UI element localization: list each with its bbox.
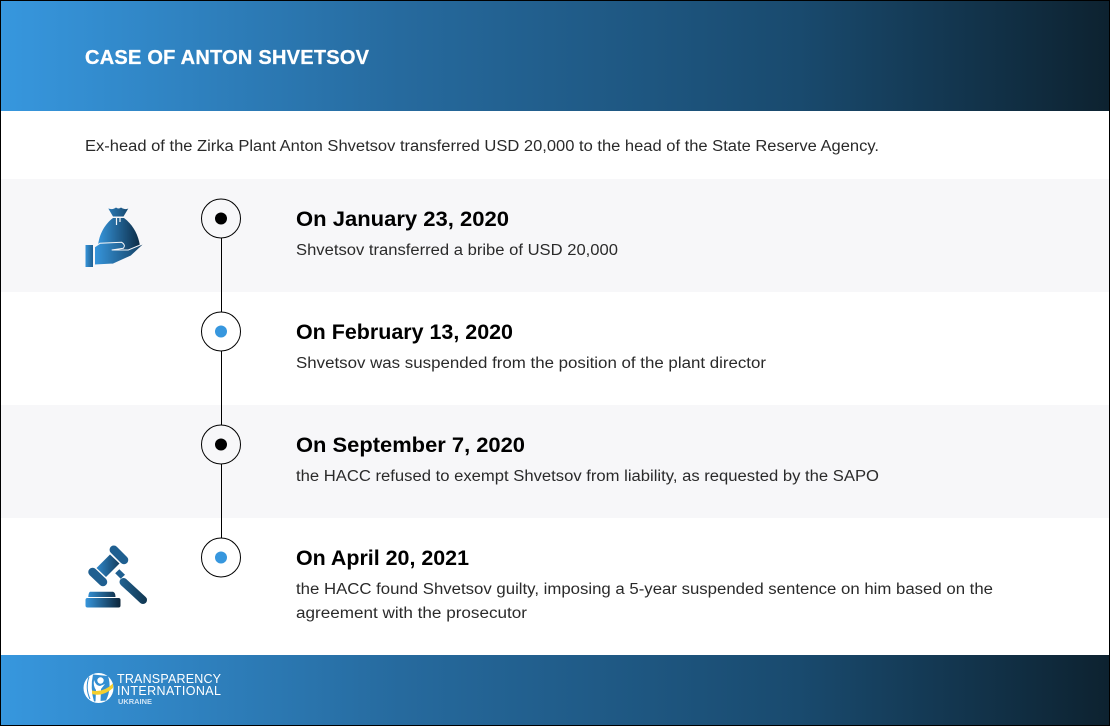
timeline node 1 xyxy=(202,199,240,238)
description 4: the HACC found Shvetsov guilty, imposing a 5-year suspended sentence on him based on the xyxy=(296,581,993,598)
intro text: Ex-head of the Zirka Plant Anton Shvetsov transferred USD 20,000 to the head of the State Reserve Agency. xyxy=(85,138,879,155)
date heading 2: On February 13, 2020 xyxy=(296,321,513,344)
timeline node 4 xyxy=(202,538,240,577)
panel: row 3 background xyxy=(1,405,1109,518)
logo: Transparency International Ukraine xyxy=(84,672,222,706)
logo wordmark: TRANSPARENCY xyxy=(117,672,222,686)
date heading 1: On January 23, 2020 xyxy=(296,208,509,231)
logo wordmark: UKRAINE xyxy=(118,699,152,706)
timeline node 3 xyxy=(202,425,240,464)
description 3: the HACC refused to exempt Shvetsov from liability, as requested by the SAPO xyxy=(296,468,879,485)
title: CASE OF ANTON SHVETSOV xyxy=(85,47,370,69)
panel: row 1 background xyxy=(1,179,1109,292)
header band xyxy=(1,1,1109,111)
logo emblem xyxy=(84,673,114,703)
description 1: Shvetsov transferred a bribe of USD 20,000 xyxy=(296,242,618,259)
date heading 4: On April 20, 2021 xyxy=(296,547,469,570)
description 4: agreement with the prosecutor xyxy=(296,605,527,622)
logo wordmark xyxy=(117,672,222,706)
description 2: Shvetsov was suspended from the position of the plant director xyxy=(296,355,766,372)
timeline line xyxy=(221,238,222,540)
logo wordmark: INTERNATIONAL xyxy=(117,684,221,698)
icon: gavel xyxy=(86,550,143,608)
date heading 3: On September 7, 2020 xyxy=(296,434,525,457)
timeline node 2 xyxy=(202,312,240,351)
description 4 xyxy=(296,581,993,622)
footer band xyxy=(1,655,1109,725)
icon: money bag on hand xyxy=(86,208,145,267)
